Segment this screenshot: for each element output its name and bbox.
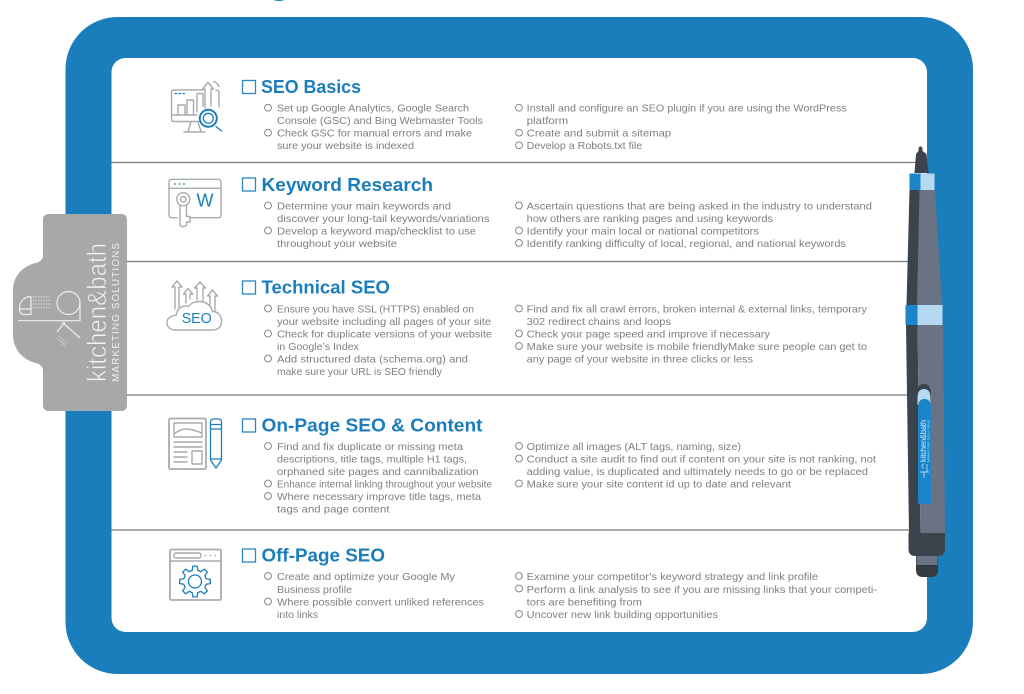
left checklist: Where necessary improve title tags, meta: [277, 492, 481, 503]
right checklist: Optimize all images (ALT tags, naming, size): [527, 442, 741, 453]
left checklist: Add structured data (schema.org) and: [277, 355, 468, 366]
pen middle band: [906, 305, 918, 325]
pen clip: [917, 384, 931, 504]
left checklist: orphaned site pages and cannibalization: [277, 467, 479, 478]
left checklist: Console (GSC) and Bing Webmaster Tools: [277, 116, 483, 127]
left checklist: Check for duplicate versions of your website: [277, 330, 492, 340]
right checklist: [516, 201, 872, 250]
right checklist: [516, 442, 876, 490]
panel: Keyword Research: [169, 174, 872, 250]
left checklist: [265, 201, 490, 250]
left checklist: Create and optimize your Google My: [277, 572, 456, 583]
left checklist: into links: [277, 610, 318, 621]
pen end cap: [916, 556, 938, 577]
icon: SEO cloud with arrows: [167, 281, 222, 330]
right checklist: any page of your website in three clicks or less: [527, 355, 753, 366]
right checklist: Make sure your site content id up to date and relevant: [527, 480, 791, 490]
left checklist: sure your website is indexed: [277, 141, 414, 152]
clipboard paper: [112, 58, 927, 632]
icon: monitor with magnifier: [172, 82, 222, 132]
left checklist: [265, 572, 484, 621]
left checklist: Find and fix duplicate or missing meta: [277, 442, 463, 453]
icon: browser with key: W: [196, 190, 214, 210]
right checklist: Conduct a site audit to find out if content on your site is not ranking, not: [527, 455, 876, 466]
right checklist: Uncover new link building opportunities: [527, 610, 718, 621]
pen upper band: [910, 174, 920, 190]
icon: browser with gear: [170, 550, 221, 600]
pen clip: kitchen&bath: [919, 420, 928, 462]
left checklist: descriptions, title tags, multiple H1 tags,: [277, 455, 467, 466]
right checklist: Identify your main local or national competitors: [527, 226, 759, 237]
left checklist: [265, 104, 483, 152]
left checklist: Where possible convert unliked references: [277, 597, 484, 608]
right checklist: platform: [527, 116, 568, 127]
right checklist: Check your page speed and improve if necessary: [527, 330, 771, 340]
right checklist: Identify ranking difficulty of local, regional, and national keywords: [527, 239, 846, 250]
top edge mark: [273, 0, 285, 1]
checkbox: [242, 549, 256, 562]
icon: SEO cloud with arrows: SEO: [182, 311, 212, 327]
pen tip: [914, 146, 928, 173]
checkbox: [242, 80, 256, 94]
right checklist: Make sure your website is mobile friendlyMake sure people can get to: [527, 342, 867, 353]
icon: document and pencil: [169, 418, 222, 469]
right checklist: tors are benefiting from: [527, 597, 642, 608]
left checklist: Ensure you have SSL (HTTPS) enabled on: [277, 304, 474, 315]
right checklist: Install and configure an SEO plugin if you are using the WordPress: [527, 104, 847, 114]
heading: SEO Basics: [261, 76, 361, 97]
panel: SEO Basics: [172, 76, 847, 152]
left checklist: Enhance internal linking throughout your website: [277, 480, 492, 490]
logo tagline: MARKETING SOLUTIONS: [111, 243, 122, 382]
left checklist: Check GSC for manual errors and make: [277, 128, 472, 140]
right checklist: [516, 572, 877, 621]
left checklist: make sure your URL is SEO friendly: [277, 367, 443, 378]
panel: Off-Page SEO: [170, 544, 877, 621]
icon: browser with key: [169, 179, 221, 227]
left checklist: throughout your website: [277, 239, 397, 250]
left checklist: Determine your main keywords and: [277, 201, 451, 212]
right checklist: [516, 104, 847, 152]
heading: Technical SEO: [262, 276, 390, 298]
right checklist: Ascertain questions that are being asked in the industry to understand: [527, 201, 872, 212]
left checklist: discover your long-tail keywords/variations: [277, 214, 490, 225]
left checklist: Develop a keyword map/checklist to use: [277, 226, 476, 237]
checkbox: [242, 178, 256, 191]
logo mark: [18, 292, 80, 347]
panel: Technical SEO: [167, 276, 868, 378]
pen lower body: [906, 325, 920, 533]
pen base: [908, 533, 945, 556]
left checklist: Business profile: [277, 585, 352, 596]
left checklist: [265, 442, 492, 516]
pen upper body: [906, 190, 920, 305]
right checklist: Find and fix all crawl errors, broken internal & external links, temporary: [527, 304, 868, 315]
clip tab with logo: [13, 214, 127, 411]
right checklist: [516, 304, 868, 366]
left checklist: your website including all pages of your site: [277, 317, 491, 328]
left checklist: Set up Google Analytics, Google Search: [277, 104, 469, 114]
heading: On-Page SEO & Content: [262, 414, 482, 436]
right checklist: 302 redirect chains and loops: [527, 317, 671, 328]
right checklist: Create and submit a sitemap: [527, 128, 671, 140]
left checklist: tags and page content: [277, 505, 390, 516]
right checklist: Perform a link analysis to see if you are missing links that your competi-: [527, 585, 877, 596]
checkbox: [242, 281, 256, 294]
heading: Keyword Research: [262, 174, 433, 195]
checkbox: [242, 419, 256, 432]
pen: [906, 146, 945, 577]
right checklist: Examine your competitor’s keyword strategy and link profile: [527, 572, 818, 583]
left checklist: [265, 304, 492, 378]
logo wordmark: kitchen&bath: [82, 243, 112, 382]
pen clip: MARKETING SOLUTIONS: [926, 420, 930, 462]
panel: On-Page SEO and Content: [169, 414, 876, 516]
heading: Off-Page SEO: [262, 544, 385, 566]
right checklist: how others are ranking pages and using keywords: [527, 214, 773, 225]
left checklist: in Google’s Index: [277, 342, 360, 353]
right checklist: adding value, is duplicated and ultimately needs to go or be replaced: [527, 467, 868, 478]
right checklist: Develop a Robots.txt file: [527, 141, 642, 152]
